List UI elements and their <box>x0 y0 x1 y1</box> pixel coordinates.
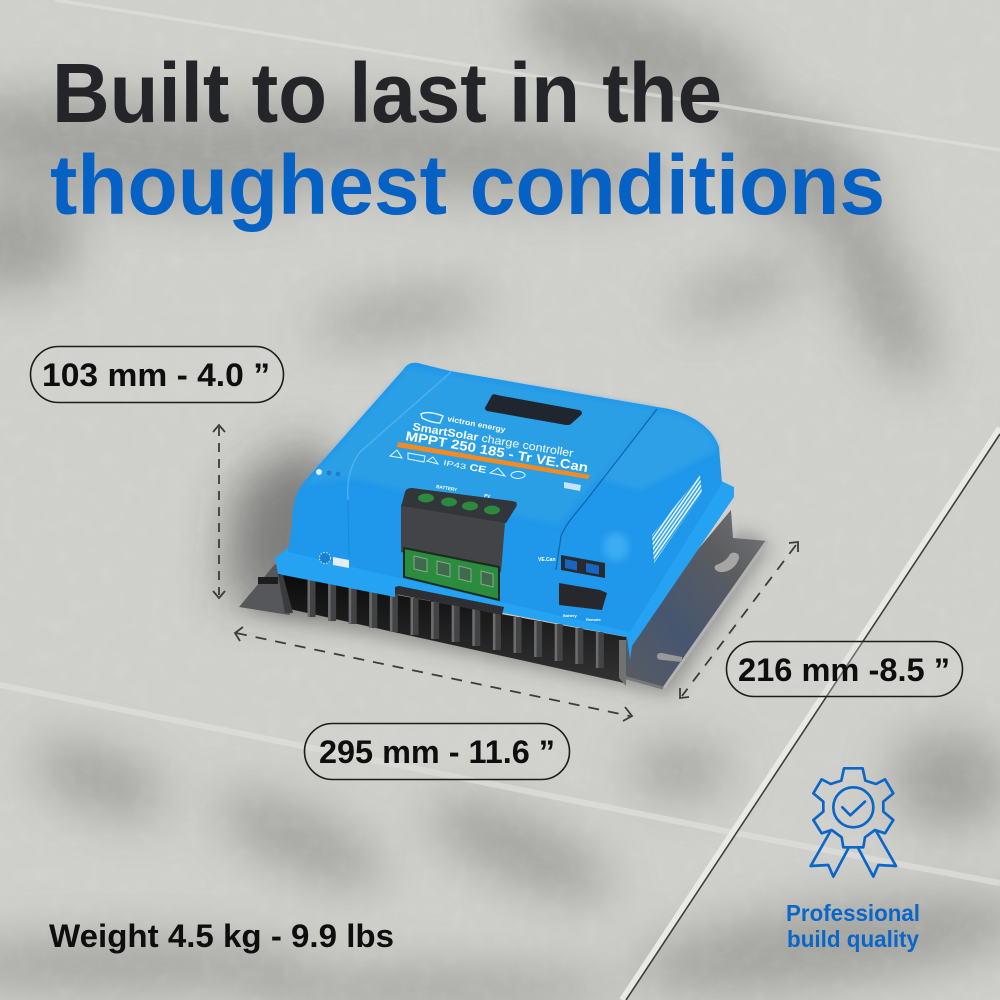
arrow: length <box>235 627 632 721</box>
green connector <box>404 548 499 600</box>
side terminal plugs <box>559 583 607 610</box>
product: MPPT solar charge controller: Remote <box>586 617 601 622</box>
pill: length <box>304 724 570 780</box>
terminal housing <box>401 488 517 572</box>
mounting plate <box>239 564 290 615</box>
pill: width <box>726 642 962 696</box>
brand label: IP43 <box>443 458 467 471</box>
arrow: height <box>213 425 225 598</box>
product: MPPT solar charge controller: Battery <box>563 613 578 618</box>
heatsink fins <box>278 573 626 686</box>
brand label: CE <box>468 462 487 476</box>
top face shading <box>304 368 657 525</box>
product: MPPT solar charge controller <box>239 363 770 695</box>
device shadow <box>225 440 400 600</box>
brand label: SmartSolar charge controller <box>412 421 575 460</box>
ve.can port <box>561 555 605 578</box>
display cover <box>485 394 582 425</box>
blue flange <box>275 480 734 660</box>
title: Built to last in the <box>52 46 722 140</box>
pill: length: 295 mm - 11.6 ” <box>319 734 555 770</box>
product: MPPT solar charge controller: VE.Can <box>538 557 556 563</box>
QR mark <box>564 482 581 491</box>
icon: quality gear badge <box>811 768 896 877</box>
product: MPPT solar charge controller: PV <box>484 493 492 499</box>
status leds <box>316 469 340 476</box>
pill: height <box>30 346 284 402</box>
badge caption <box>786 900 920 952</box>
enclosure body <box>288 363 722 632</box>
weight label: Weight 4.5 kg - 9.9 lbs <box>49 918 394 954</box>
arrow: width <box>680 542 798 698</box>
usb port <box>333 557 349 568</box>
pill: width: 216 mm -8.5 ” <box>738 652 950 688</box>
title: thoughest conditions <box>50 138 885 232</box>
right shoulder shading <box>600 411 717 490</box>
right highlight <box>603 533 629 561</box>
orange stripe <box>397 442 590 479</box>
connector lip <box>395 586 504 615</box>
badge caption: build quality <box>787 926 919 952</box>
brand label: MPPT 250 185 - Tr VE.Can <box>404 428 589 475</box>
product: MPPT solar charge controller: BATTERY <box>436 484 458 492</box>
brand label <box>390 413 589 478</box>
vent grid <box>652 475 702 563</box>
enclosure seams <box>348 372 657 570</box>
pill: height: 103 mm - 4.0 ” <box>42 357 270 393</box>
title <box>50 46 885 232</box>
badge caption: Professional <box>786 900 920 926</box>
brand label: victron energy <box>447 414 507 434</box>
label symbols <box>390 450 525 478</box>
